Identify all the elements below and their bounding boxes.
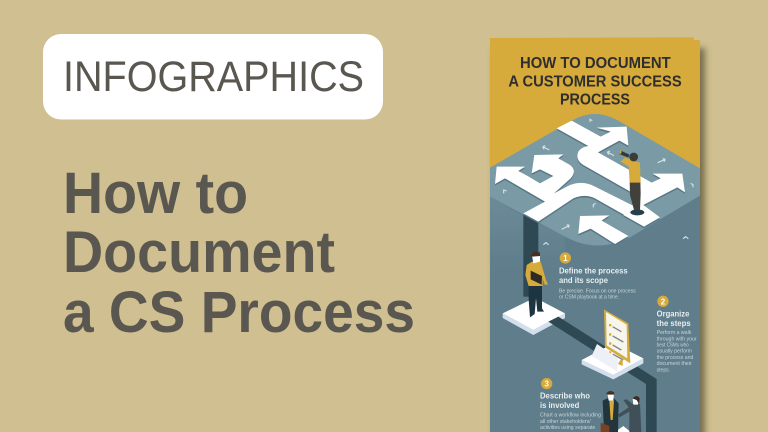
- man with binoculars: [619, 150, 644, 215]
- step 2 text: steps.: [657, 367, 670, 373]
- step 2 text: best CSMs who: [657, 342, 689, 348]
- person 1 with book: [525, 251, 548, 317]
- step 1 text: [559, 265, 636, 301]
- step 3 text: Chart a workflow including: [540, 413, 601, 419]
- step 2 text: Organize: [657, 308, 690, 318]
- card title: [508, 55, 682, 108]
- step 1 badge: 1: [563, 254, 568, 263]
- connector strip: [548, 317, 657, 432]
- step 2 badge: [657, 296, 669, 307]
- badge: INFOGRAPHICS: INFOGRAPHICS: [63, 53, 364, 101]
- main heading: How to: [63, 161, 248, 226]
- road shadows: [495, 122, 685, 246]
- main heading: Document: [63, 220, 335, 285]
- step 2 text: the process and: [657, 355, 693, 361]
- main heading: a CS Process: [63, 280, 415, 345]
- two business people: [601, 391, 641, 432]
- road with top arrow, right arrow and end: [557, 121, 685, 227]
- card title: HOW TO DOCUMENT: [520, 55, 671, 72]
- badge: INFOGRAPHICS: [43, 34, 383, 120]
- step 2 text: document their: [657, 361, 692, 367]
- yellow header panel: [490, 37, 700, 170]
- step 1 text: and its scope: [559, 275, 608, 285]
- step 1 platform: [503, 298, 565, 335]
- step 2 text: the steps: [657, 318, 691, 328]
- step 1 text: Define the process: [559, 265, 628, 275]
- road with left arrows and lower branch: [495, 154, 645, 227]
- step 1 badge: [560, 252, 571, 264]
- step 3 text: is involved: [540, 400, 579, 410]
- step 3 platform: [615, 426, 631, 432]
- infographic card: [490, 37, 700, 432]
- step 3 badge: [541, 378, 552, 389]
- card base panel: [490, 38, 700, 432]
- step 2 platform: [582, 343, 643, 379]
- step 3 badge: 3: [544, 380, 549, 389]
- step 3 text: Describe who: [540, 390, 590, 400]
- card title: A CUSTOMER SUCCESS: [508, 73, 682, 90]
- step 3 text: [540, 390, 601, 431]
- step 2 text: Perform a walk: [657, 330, 692, 336]
- card title: PROCESS: [560, 91, 630, 108]
- step 2 badge: 2: [661, 297, 666, 306]
- step 2 text: usually perform: [657, 349, 693, 355]
- main heading: [63, 161, 415, 345]
- step 2 text: [657, 308, 697, 373]
- step 2 text: through with your: [657, 336, 697, 342]
- dark pillar: [523, 214, 538, 297]
- card shadow: [494, 48, 705, 432]
- small surface arrows: [504, 119, 693, 245]
- bottom arrow: [578, 215, 628, 244]
- step 3 text: all other stakeholders/: [540, 419, 591, 425]
- step 3 text: activities using separate: [540, 425, 595, 431]
- step 1 text: Be precise. Focus on one process: [559, 289, 636, 295]
- isometric surface: [490, 114, 700, 246]
- step 1 text: or CSM playbook at a time.: [559, 295, 619, 301]
- envelope: [592, 344, 618, 371]
- left side face: [490, 197, 565, 270]
- checklist document: [604, 309, 630, 366]
